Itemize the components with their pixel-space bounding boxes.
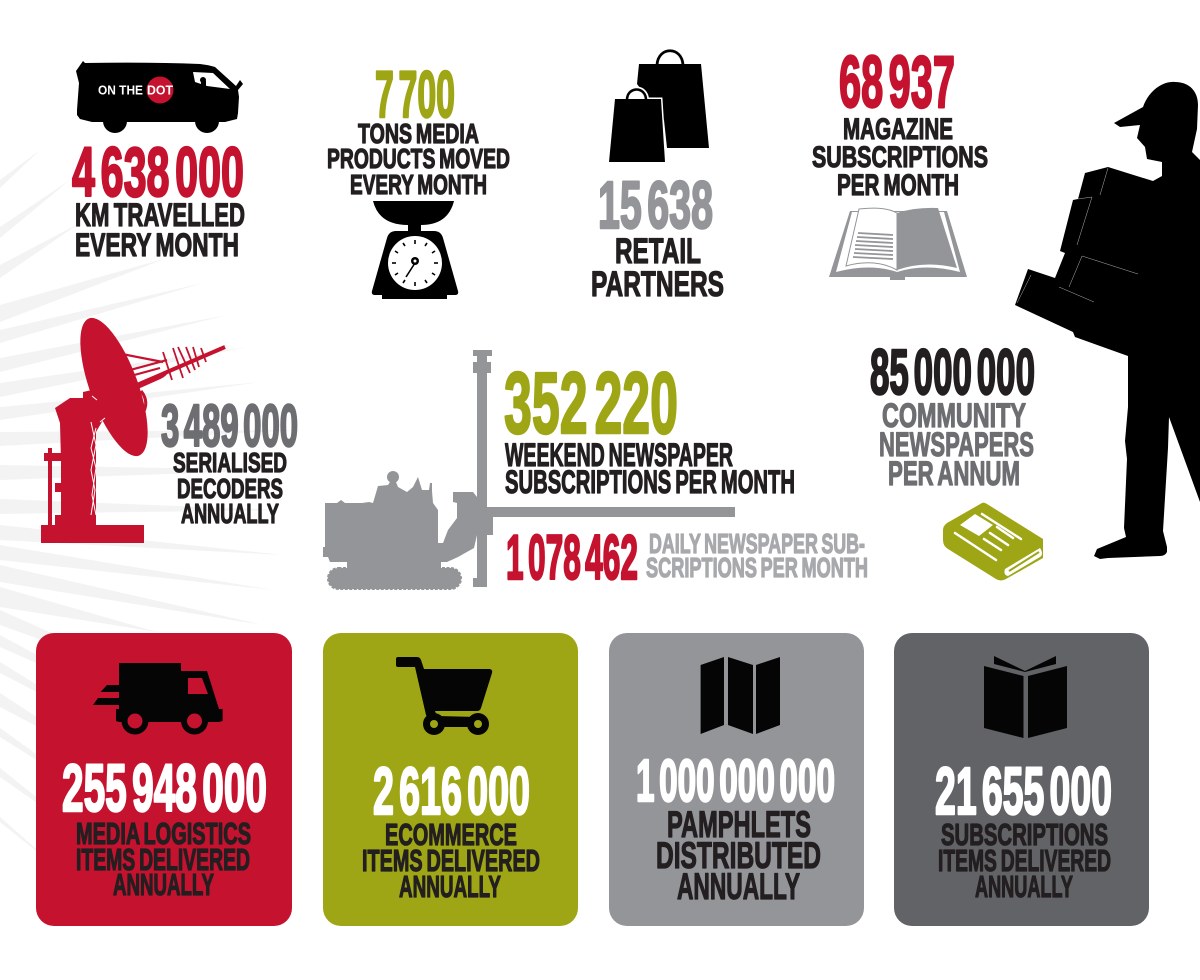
icon: shopping bags [609, 51, 709, 162]
number: 1 078 462: 1 078 462 [506, 523, 638, 593]
label: tons media products [327, 118, 510, 200]
label: km travelled: KM TRAVELLED [75, 197, 245, 233]
label: community newspapers: COMMUNITY [882, 397, 1026, 435]
label: retail partners [591, 232, 724, 304]
label: km travelled [75, 197, 245, 263]
label: weekend newspaper subscriptions [505, 437, 795, 500]
label: community newspapers: NEWSPAPERS [879, 426, 1034, 464]
label: tons media products: PRODUCTS MOVED [327, 143, 510, 174]
icon: weighing scale [372, 201, 458, 299]
number: 3 489 000: 3 489 000 [161, 393, 298, 459]
panel: pamphlets [609, 633, 864, 926]
label: tons media products: TONS MEDIA [358, 118, 479, 149]
label: pamphlets distributed: DISTRIBUTED [656, 835, 821, 876]
label: ecommerce items: ITEMS DELIVERED [362, 843, 540, 878]
stat: retail partners [591, 51, 724, 304]
label: km travelled: EVERY MONTH [75, 227, 239, 263]
label: serialised decoders: ANNUALLY [181, 498, 279, 529]
label: serialised decoders: SERIALISED [173, 447, 287, 478]
icon: shopping cart [396, 657, 492, 735]
label: serialised decoders: DECODERS [177, 473, 283, 504]
label: pamphlets distributed: PAMPHLETS [667, 804, 811, 845]
icon: delivery van [76, 61, 243, 133]
icon: delivery van: DOT [147, 84, 173, 98]
number: 2 616 000: 2 616 000 [373, 754, 530, 829]
label: retail partners: PARTNERS [591, 265, 724, 304]
number: 68 937: 68 937 [839, 42, 955, 123]
icon: delivery van: ON THE [98, 84, 143, 98]
label: pamphlets distributed: ANNUALLY [677, 866, 800, 907]
label: subscriptions items: ANNUALLY [975, 869, 1073, 904]
label: pamphlets distributed [656, 804, 821, 907]
stat: newspaper subscriptions [323, 350, 868, 593]
label: media logistics items [76, 816, 251, 902]
icon: satellite dish [41, 310, 225, 543]
label: magazine subscriptions: PER MONTH [837, 169, 959, 202]
label: community newspapers: PER ANNUM [888, 455, 1020, 493]
label: daily newspaper subscriptions [646, 528, 868, 583]
label: subscriptions items [938, 817, 1111, 904]
icon: open book [829, 208, 967, 280]
icon: moving truck [93, 663, 223, 734]
label: subscriptions items: SUBSCRIPTIONS [941, 817, 1108, 852]
number: 352 220: 352 220 [504, 355, 678, 452]
label: ecommerce items: ANNUALLY [399, 869, 501, 904]
stat: kilometres travelled [72, 61, 245, 263]
label: daily newspaper subscriptions: DAILY NEWSPAPER SUB- [649, 528, 865, 559]
label: retail partners: RETAIL [615, 232, 701, 271]
number: 255 948 000: 255 948 000 [62, 751, 267, 826]
number: 85 000 000: 85 000 000 [870, 336, 1035, 408]
stat: magazine subscriptions [812, 42, 988, 280]
icon: folded map [701, 657, 780, 734]
label: tons media products: EVERY MONTH [350, 169, 487, 200]
label: magazine subscriptions: SUBSCRIPTIONS [812, 141, 988, 174]
label: media logistics items: MEDIA LOGISTICS [76, 816, 251, 851]
stat: tons moved [327, 57, 510, 299]
stat: serialised decoders [41, 310, 298, 543]
label: community newspapers [879, 397, 1034, 493]
label: serialised decoders [173, 447, 287, 529]
illustration: delivery man carrying boxes [1015, 82, 1200, 559]
number: 7 700: 7 700 [375, 57, 455, 131]
number: 1 000 000 000: 1 000 000 000 [636, 748, 835, 814]
label: media logistics items: ITEMS DELIVERED [76, 842, 250, 877]
label: daily newspaper subscriptions: SCRIPTIONS PER MONTH [646, 552, 868, 583]
label: weekend newspaper subscriptions: WEEKEND NEWSPAPER [505, 437, 733, 473]
number: 15 638: 15 638 [598, 168, 713, 243]
icon: drilling machine [323, 350, 735, 589]
label: magazine subscriptions: MAGAZINE [843, 113, 953, 146]
label: ecommerce items: ECOMMERCE [385, 817, 517, 852]
label: weekend newspaper subscriptions: SUBSCRIPTIONS PER MONTH [505, 464, 795, 500]
stat: community newspapers [870, 336, 1043, 580]
icon: folded newspaper [943, 503, 1043, 580]
panel: subscriptions [894, 633, 1149, 926]
panel: ecommerce [323, 633, 578, 926]
label: magazine subscriptions [812, 113, 988, 202]
label: ecommerce items [362, 817, 540, 904]
panel: media logistics [36, 633, 292, 926]
icon: open book [984, 656, 1067, 738]
label: media logistics items: ANNUALLY [113, 867, 214, 902]
number: 4 638 000: 4 638 000 [72, 133, 244, 211]
